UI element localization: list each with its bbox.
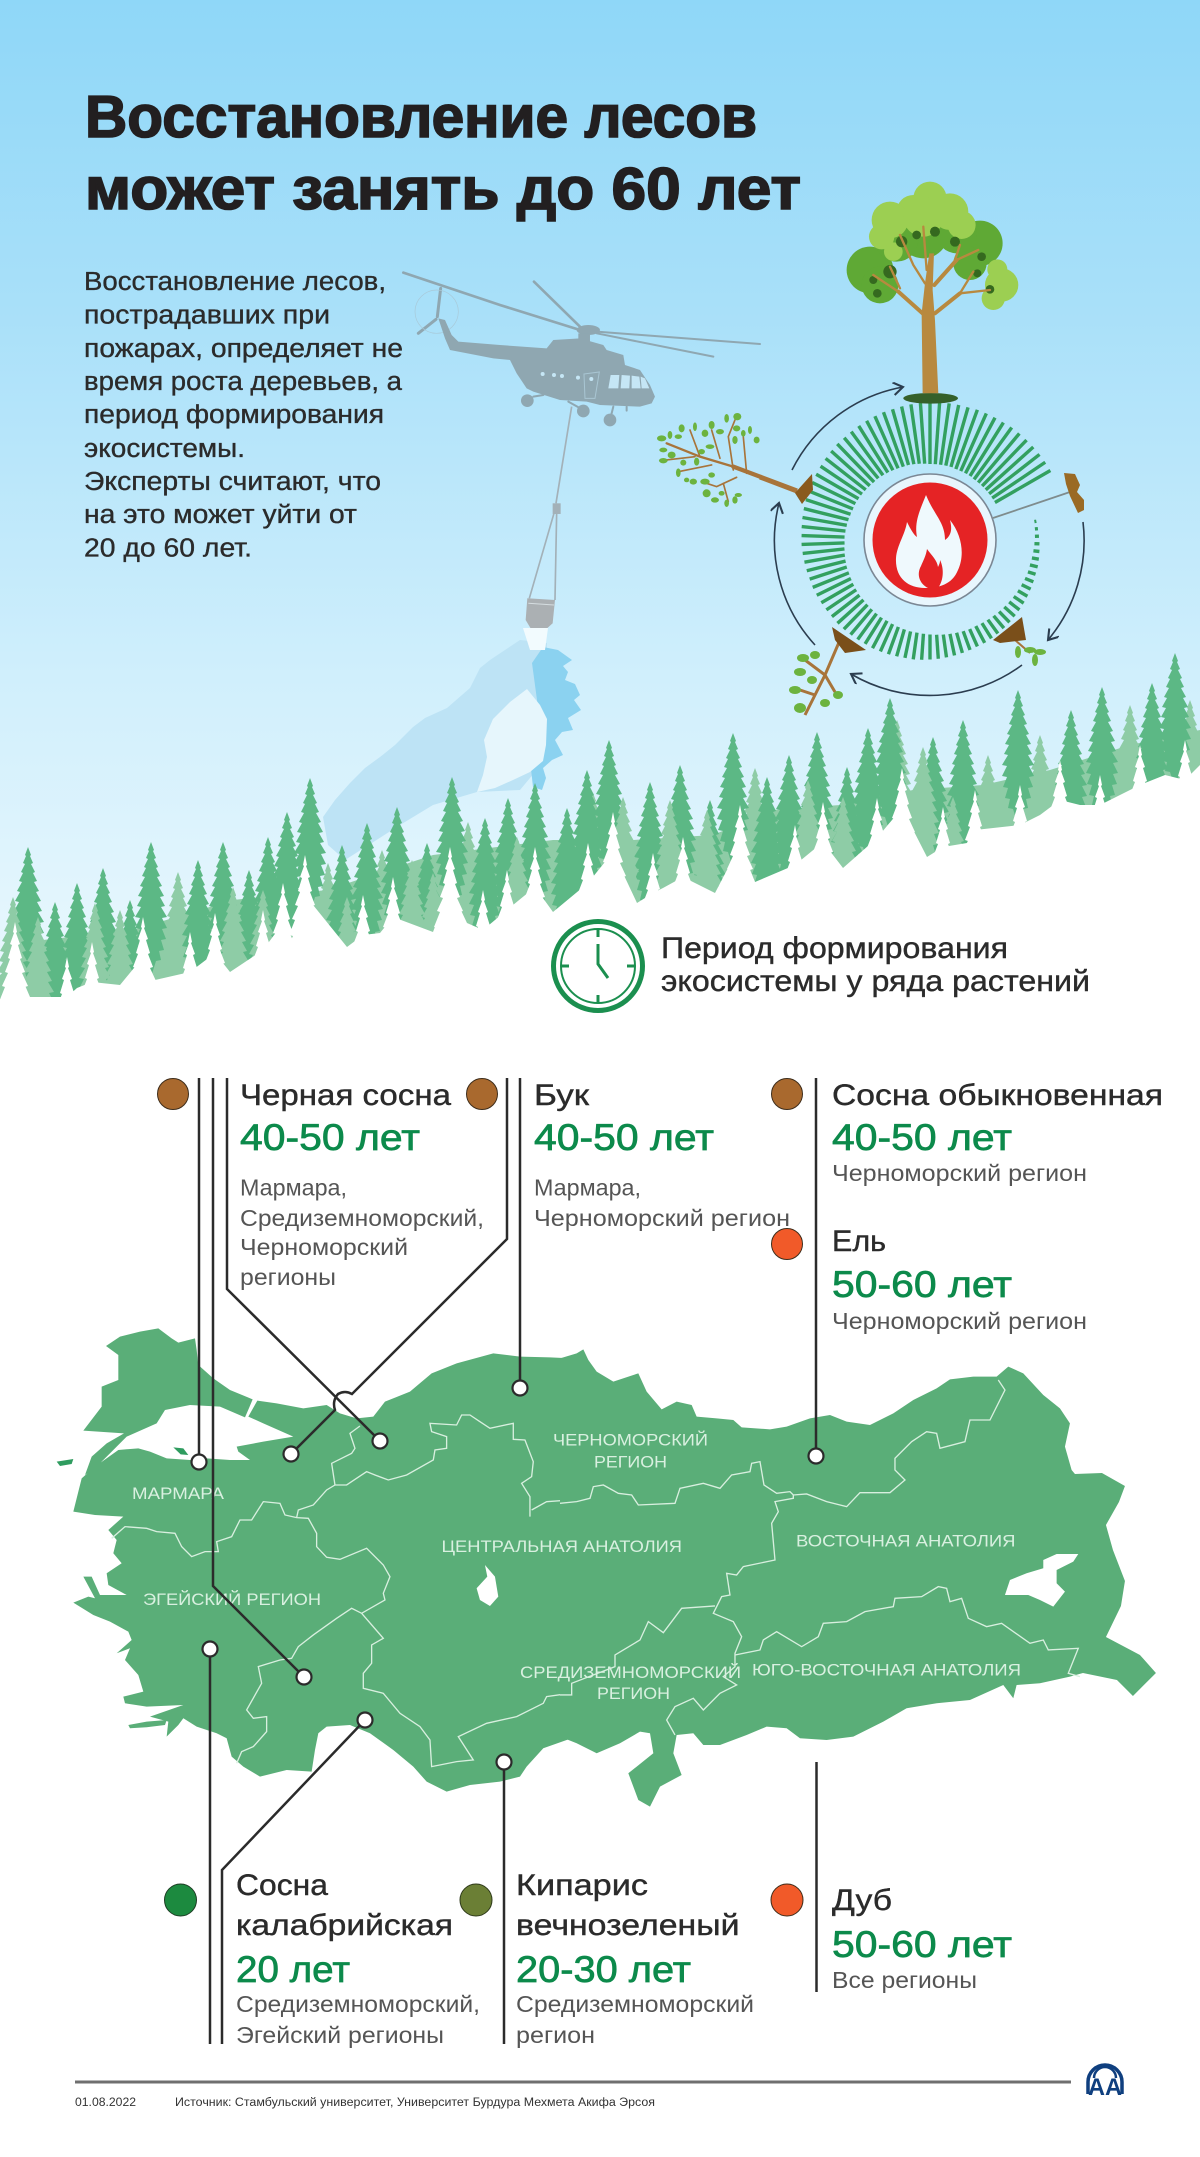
- intro paragraph: Эксперты считают, что: [84, 468, 381, 496]
- broken stump with gray line: [993, 473, 1084, 518]
- region labels: [132, 1430, 1021, 1703]
- label: beech: 40-50 лет: [534, 1117, 714, 1158]
- region labels: ЭГЕЙСКИЙ РЕГИОН: [143, 1590, 321, 1609]
- cycle arrows: [774, 387, 1084, 695]
- forest: [0, 653, 1200, 1067]
- label: calabrian pine: Средиземноморский,: [236, 1991, 480, 2017]
- intro paragraph: пожарах, определяет не: [84, 335, 403, 363]
- tick ring: [802, 402, 1050, 660]
- background light fir trees: [162, 700, 1200, 1007]
- label: black pine: регионы: [240, 1264, 336, 1290]
- label: calabrian pine: калабрийская: [236, 1909, 453, 1942]
- label: black pine: [158, 1078, 484, 1290]
- left branch sapling: [657, 413, 813, 507]
- agency logo: AA: [1088, 2074, 1122, 2101]
- label: scots pine: [772, 1078, 1163, 1186]
- label: spruce: [772, 1225, 1087, 1334]
- label: calabrian pine: Сосна: [236, 1869, 328, 1902]
- label: beech: Черноморский регион: [534, 1205, 790, 1231]
- fire icon: [864, 474, 996, 606]
- title: может занять до 60 лет: [85, 156, 801, 222]
- label: oak: Дуб: [832, 1884, 892, 1917]
- label: evergreen cypress: вечнозеленый: [516, 1909, 740, 1942]
- label: black pine: Черноморский: [240, 1234, 408, 1260]
- label: beech: Бук: [534, 1079, 590, 1112]
- icon: clock: [554, 922, 642, 1010]
- map of Turkey: [57, 1328, 1156, 1807]
- intro paragraph: время роста деревьев, а: [84, 368, 403, 396]
- section heading with clock icon: Период формирования: [661, 932, 1008, 965]
- sky background: [0, 0, 1200, 1040]
- label: oak: Все регионы: [832, 1967, 977, 1993]
- title: Восстановление лесов: [85, 84, 757, 150]
- label: calabrian pine: [164, 1869, 480, 2048]
- region labels: ЮГО-ВОСТОЧНАЯ АНАТОЛИЯ: [752, 1660, 1021, 1680]
- helicopter with water bucket: [403, 273, 760, 633]
- label: evergreen cypress: Кипарис: [516, 1869, 648, 1902]
- label: spruce: Черноморский регион: [832, 1308, 1087, 1334]
- foreground light fir trees: [0, 747, 969, 1052]
- intro paragraph: [84, 268, 403, 562]
- forest regeneration cycle diagram: [657, 182, 1084, 715]
- water spray: [323, 628, 581, 860]
- label: oak: [771, 1884, 1012, 1993]
- label: black pine: 40-50 лет: [240, 1117, 420, 1158]
- label: spruce: 50-60 лет: [832, 1264, 1012, 1305]
- label: calabrian pine: Эгейский регионы: [236, 2022, 444, 2048]
- label: calabrian pine: 20 лет: [236, 1949, 350, 1990]
- label: evergreen cypress: регион: [516, 2022, 595, 2048]
- region labels: РЕГИОН: [597, 1684, 670, 1703]
- map west part: [57, 1328, 572, 1792]
- region labels: РЕГИОН: [594, 1452, 667, 1472]
- section heading with clock icon: [554, 922, 1090, 1010]
- region labels: СРЕДИЗЕМНОМОРСКИЙ: [520, 1663, 741, 1682]
- label: black pine: Черная сосна: [240, 1079, 451, 1112]
- intro paragraph: на это может уйти от: [84, 501, 357, 529]
- label: beech: Мармара,: [534, 1174, 641, 1200]
- label: black pine: Мармара,: [240, 1174, 347, 1200]
- footer: Источник: Стамбульский университет, Университет Бурдура Мехмета Акифа Эрсоя: [175, 2097, 655, 2109]
- section heading with clock icon: экосистемы у ряда растений: [661, 965, 1090, 998]
- white foreground trees and ground: [0, 740, 1200, 1067]
- label: beech: [466, 1078, 790, 1231]
- leader lines and map markers: [192, 1078, 824, 2044]
- region labels: ЦЕНТРАЛЬНАЯ АНАТОЛИЯ: [442, 1537, 682, 1556]
- footer: [75, 2080, 1071, 2109]
- region labels: МАРМАРА: [132, 1484, 225, 1503]
- intro paragraph: экосистемы.: [84, 435, 245, 463]
- label: evergreen cypress: 20-30 лет: [516, 1949, 691, 1990]
- label: scots pine: Сосна обыкновенная: [832, 1079, 1163, 1112]
- bottom left sapling: [789, 627, 866, 715]
- bottom right sprout: [993, 617, 1046, 666]
- light green tree mass: [0, 730, 1200, 1030]
- intro paragraph: пострадавших при: [84, 302, 330, 330]
- label: oak: 50-60 лет: [832, 1924, 1012, 1965]
- label: black pine: Средиземноморский,: [240, 1205, 484, 1231]
- label: scots pine: 40-50 лет: [832, 1117, 1012, 1158]
- footer: 01.08.2022: [75, 2097, 136, 2109]
- region labels: ВОСТОЧНАЯ АНАТОЛИЯ: [796, 1532, 1016, 1550]
- label: spruce: Ель: [832, 1225, 886, 1258]
- region labels: ЧЕРНОМОРСКИЙ: [553, 1430, 708, 1450]
- title: [85, 84, 801, 222]
- intro paragraph: период формирования: [84, 401, 384, 429]
- label: scots pine: Черноморский регион: [832, 1160, 1087, 1186]
- intro paragraph: Восстановление лесов,: [84, 268, 386, 296]
- label: evergreen cypress: Средиземноморский: [516, 1991, 754, 2017]
- map east part: [560, 1349, 1156, 1807]
- dark fir trees: [12, 653, 1191, 1037]
- big tree: [847, 182, 1018, 404]
- intro paragraph: 20 до 60 лет.: [84, 534, 252, 562]
- label: evergreen cypress: [460, 1869, 754, 2048]
